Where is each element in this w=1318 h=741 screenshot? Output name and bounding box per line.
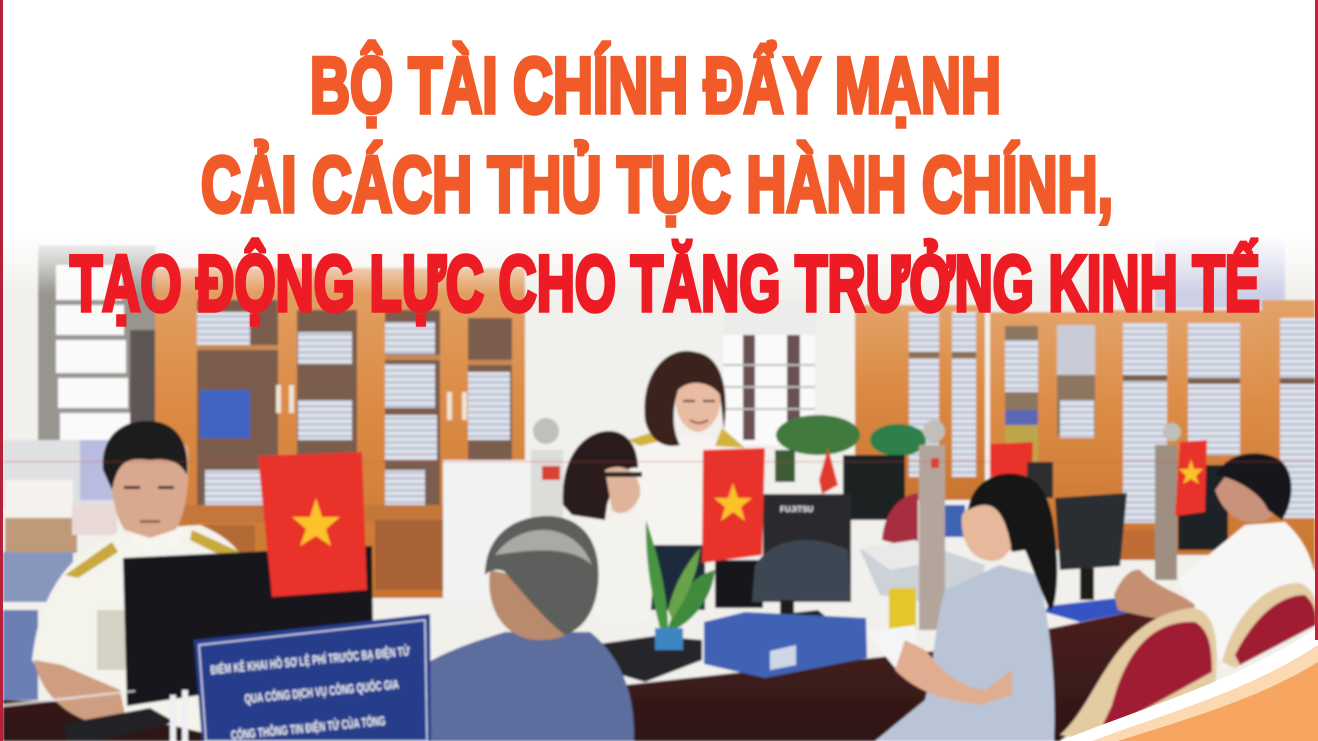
- white partition panel: [443, 460, 531, 600]
- left wood cabinet: [155, 268, 525, 598]
- paper under woman's hands: [866, 625, 918, 670]
- title line 1: BỘ TÀI CHÍNH ĐẨY MẠNH: [310, 40, 1001, 130]
- plant: [775, 415, 926, 482]
- top fade over photo: [3, 232, 1315, 294]
- red chair back: [1222, 583, 1318, 668]
- keyboard centre: [592, 636, 702, 682]
- white labels on blue box: [770, 645, 796, 670]
- centre window: [723, 300, 815, 445]
- yellow bottle: [889, 588, 916, 632]
- flag left with star: [258, 452, 367, 597]
- keyboard left: [62, 708, 175, 741]
- right wood cabinets: [855, 300, 1315, 570]
- faded binders top right: [1155, 240, 1285, 308]
- customer older man from behind: [360, 516, 634, 741]
- chair behind counter: [882, 493, 918, 550]
- dark monitor back: [843, 455, 905, 520]
- blue notice sign: [194, 614, 431, 741]
- dark equipment right: [1178, 465, 1228, 550]
- desk: [3, 608, 1185, 741]
- title: [70, 40, 1260, 328]
- photo: tax office service counter: [3, 235, 1318, 741]
- left window: [38, 245, 156, 450]
- bottom-right orange corner: [1060, 627, 1318, 741]
- back wall: [3, 235, 1315, 741]
- red flag behind woman: [990, 442, 1033, 476]
- left shelves and boxes: [3, 440, 117, 700]
- customer woman in grey dress: [875, 474, 1057, 741]
- blue document box: [704, 612, 867, 678]
- left border: [0, 0, 3, 741]
- right border: [1315, 0, 1318, 640]
- silver pole right: [1155, 423, 1181, 580]
- paper stack and scissors on counter: [860, 505, 985, 610]
- glass partition top rail: [3, 461, 1315, 707]
- flag centre with star: [702, 448, 765, 563]
- silver pole centre: [919, 420, 945, 630]
- monitor Fujitsu: FUJITSU: [780, 505, 814, 514]
- blue notice sign: QUA CỔNG DỊCH VỤ CÔNG QUỐC GIA: [244, 677, 400, 706]
- office chair back: [1027, 462, 1053, 498]
- snake plant on counter: [646, 520, 715, 650]
- red chair front: [1060, 608, 1217, 741]
- small flag centre: [819, 448, 838, 494]
- monitor right: [1045, 493, 1140, 622]
- flag right with star: [1175, 440, 1207, 516]
- monitor Fujitsu: [748, 494, 851, 630]
- silver pole with ball left: [531, 418, 563, 525]
- officer seated: woman with glasses: [563, 431, 655, 628]
- pens in holder: [170, 690, 188, 741]
- blue notice sign: ĐIỂM KÊ KHAI HỒ SƠ LỆ PHÍ TRƯỚC BẠ ĐIỆN TỬ: [210, 643, 411, 677]
- customer man in white T-shirt: [1114, 453, 1318, 670]
- officer left: uniformed man: [32, 421, 242, 741]
- officer standing: woman: [628, 351, 763, 610]
- monitor left: [123, 546, 373, 706]
